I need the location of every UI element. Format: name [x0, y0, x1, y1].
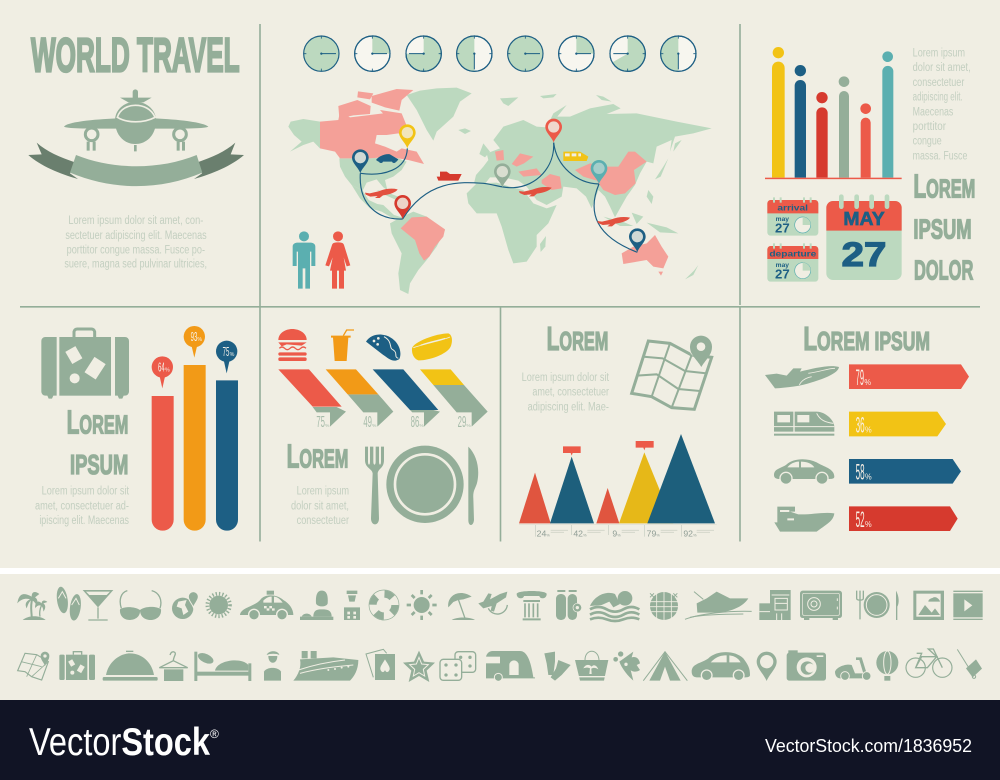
icon: ribbon banner	[28, 143, 244, 186]
calendar: departure: 27	[775, 267, 790, 281]
text block: adipiscing elit.	[913, 90, 963, 104]
icon: car	[692, 652, 750, 681]
footer	[0, 700, 1000, 780]
icon: sunglasses	[120, 591, 161, 620]
icon: tent	[643, 652, 687, 681]
icon: cloche	[103, 651, 158, 681]
bar chart: 64%	[152, 356, 174, 531]
bar: 58%	[849, 459, 961, 485]
chevron chart: %	[325, 423, 330, 429]
icon: man	[293, 231, 315, 289]
icon: hotel building	[759, 590, 791, 620]
icon: starfish	[403, 651, 435, 682]
icon: playing cards	[366, 649, 395, 680]
calendar: departure: may	[776, 262, 789, 269]
icon: plane with clock	[478, 592, 507, 614]
icon: palm trees	[17, 592, 47, 620]
bar: 52%: 52	[856, 507, 865, 532]
map pins	[352, 119, 646, 252]
food icons	[278, 329, 452, 361]
icon: beach bag	[575, 651, 608, 681]
text block: intro: porttitor congue massa. Fusce po-	[67, 243, 205, 257]
icon band background	[0, 574, 1000, 700]
icon: folded map with pin	[632, 336, 712, 409]
text block: Lorem ipsum dolor sit	[42, 483, 130, 497]
bar: 79%: 79	[856, 365, 864, 390]
text block: amet, consectetuer	[532, 385, 609, 399]
icon: bellboy	[264, 651, 281, 681]
bar: 58%: %	[865, 472, 872, 482]
text block: amet, consectetuer ad-	[35, 498, 129, 512]
bar: 79%	[849, 364, 969, 390]
icon: caravan	[486, 651, 535, 681]
calendar: arrival: 27	[775, 222, 790, 236]
icon: train	[774, 412, 834, 436]
text block: dolor sit amet,	[291, 498, 349, 512]
text block	[522, 370, 610, 413]
bar chart: 75%	[216, 341, 238, 531]
chevron chart: %	[466, 423, 471, 429]
text block: consectetuer	[297, 513, 349, 527]
text block: Lorem ipsum	[913, 46, 965, 60]
icon: scuba tanks	[556, 590, 582, 620]
heading: lorem ipsum dolor: IPSUM	[913, 213, 972, 244]
icon: column	[517, 591, 547, 620]
icon: location pin	[757, 652, 777, 681]
bar chart: 93%	[184, 326, 206, 531]
bar chart: 64%: %	[165, 368, 170, 374]
icon: lifebuoy	[369, 590, 399, 620]
chevron chart: 75	[316, 414, 325, 431]
mountain chart: 42%	[573, 528, 587, 538]
text block: Lorem ipsum	[297, 483, 349, 497]
icon: martini	[83, 590, 113, 620]
icon: film	[953, 591, 983, 620]
icon: fish	[613, 651, 640, 681]
icon: scooter	[835, 657, 871, 680]
footer logo: ®	[210, 727, 219, 741]
icon: suitcase	[41, 329, 129, 399]
heading: lorem: LOREM	[287, 439, 348, 476]
calendar: may 27: MAY	[843, 208, 885, 229]
text block: intro: suere, magna sed pulvinar ultricies,	[64, 257, 207, 271]
column chart	[765, 47, 902, 179]
text block: ipiscing elit. Maecenas	[39, 513, 129, 527]
mountain chart: 79%	[647, 528, 660, 538]
calendar: arrival	[767, 197, 818, 236]
icon: airplane front view	[64, 89, 208, 151]
text block: Maecenas	[913, 104, 953, 118]
text block: intro: Lorem ipsum dolor sit amet, con-	[68, 213, 203, 227]
icon: receptionist	[300, 591, 333, 620]
icon: ship	[774, 507, 834, 532]
text block: massa. Fusce	[913, 148, 968, 162]
bar: 79%: %	[864, 377, 871, 387]
world map	[288, 88, 712, 294]
text block	[913, 46, 971, 162]
text block: intro: sectetuer adipiscing elit. Maecenas	[65, 228, 207, 242]
chevron chart	[278, 369, 488, 431]
icon: picture	[913, 591, 944, 620]
icon: fork plate knife	[365, 446, 478, 525]
map vehicles	[365, 152, 630, 226]
heading: lorem: LOREM	[547, 321, 608, 358]
calendar: departure: departure	[769, 248, 817, 258]
icon: plate and cutlery	[857, 591, 899, 620]
heading: lorem ipsum: LOREM	[67, 404, 128, 441]
calendar: departure	[767, 243, 818, 282]
text block: porttitor	[913, 119, 946, 133]
icon: swimmer	[590, 591, 639, 621]
panel dividers	[20, 24, 980, 542]
footer url: VectorStock.com/1836952	[765, 736, 972, 756]
mountain chart: 92%	[683, 528, 697, 538]
chevron chart: %	[419, 423, 424, 429]
heading: lorem ipsum	[67, 404, 128, 480]
chevron chart: 29	[458, 414, 466, 431]
icon: dice	[440, 652, 476, 680]
bar chart: 64%: 64	[158, 360, 165, 375]
icon: small suitcase	[59, 652, 95, 680]
bar chart: 93%: %	[197, 337, 202, 343]
chevron chart: %	[372, 423, 377, 429]
icon: hot air balloon	[876, 651, 898, 681]
icon: airplane	[765, 366, 839, 388]
icon: camera	[787, 650, 826, 681]
icon: safe	[800, 591, 842, 620]
text block	[291, 483, 349, 527]
mountain chart	[519, 434, 717, 538]
bar: 36%: %	[865, 424, 872, 434]
bar chart: 75%: 75	[223, 344, 229, 359]
chevron chart: 86	[411, 414, 419, 431]
icon rows: left half	[17, 586, 476, 682]
calendar: arrival: arrival	[777, 202, 808, 212]
bar: 58%: 58	[856, 460, 865, 485]
white separator strip	[0, 568, 1000, 574]
icon rows: right half	[478, 590, 983, 681]
panel: lorem mountains	[519, 321, 969, 538]
panel: column chart and calendars	[765, 46, 975, 285]
icon: cruise ship	[293, 651, 358, 681]
icon: bicycle	[906, 649, 952, 677]
clocks row	[304, 36, 696, 71]
chevron chart: 49	[363, 414, 372, 431]
icon: globe with pin	[172, 592, 198, 619]
heading: lorem ipsum dolor	[913, 168, 975, 285]
icon: rolling luggage	[957, 649, 982, 678]
panel: world map and clocks	[288, 36, 712, 294]
calendar: arrival: may	[776, 216, 789, 223]
icon: woman	[325, 231, 350, 289]
calendar: may 27: 27	[842, 236, 886, 274]
icon: hanger	[159, 652, 188, 681]
icon: bed	[194, 651, 251, 681]
text block: dolor sit amet,	[913, 60, 971, 74]
text block: congue	[913, 134, 942, 148]
icon: yacht	[685, 592, 752, 619]
icon: flip flops	[55, 586, 82, 621]
title: WORLD TRAVEL	[31, 29, 240, 83]
icon: sun burst	[207, 594, 230, 616]
icon: disco ball	[650, 592, 678, 620]
icon: flippers	[544, 652, 571, 681]
heading: lorem ipsum: IPSUM	[70, 449, 128, 480]
calendar: may 27	[826, 197, 902, 280]
route lines	[360, 143, 637, 252]
bar chart: 75%: %	[230, 352, 235, 358]
bar: 36%	[849, 412, 946, 437]
text block	[35, 483, 130, 527]
background	[0, 0, 1000, 568]
bar chart: 93%: 93	[191, 329, 197, 344]
heading: lorem ipsum: LOREM IPSUM	[803, 321, 930, 358]
icon: map small	[18, 652, 49, 680]
bar: 36%: 36	[856, 412, 865, 437]
mountain chart: 24%	[537, 528, 550, 538]
text block: adipiscing elit. Mae-	[528, 399, 609, 413]
footer logo: VectorStock	[29, 721, 210, 764]
bar: 52%: %	[865, 519, 872, 529]
text block: intro	[64, 213, 207, 271]
icon: hotel porter	[344, 591, 360, 620]
mountain chart: 9%	[612, 528, 621, 538]
panel: luggage bars	[35, 326, 488, 531]
icon: car	[774, 459, 834, 484]
icon: taxi	[240, 591, 293, 620]
text block: Lorem ipsum dolor sit	[522, 370, 610, 384]
panel: world travel title	[28, 29, 244, 271]
icon: beach umbrella	[448, 593, 475, 620]
text block: consectetuer	[913, 75, 964, 89]
bar: 52%	[849, 506, 958, 532]
icon: small sun	[407, 590, 437, 620]
